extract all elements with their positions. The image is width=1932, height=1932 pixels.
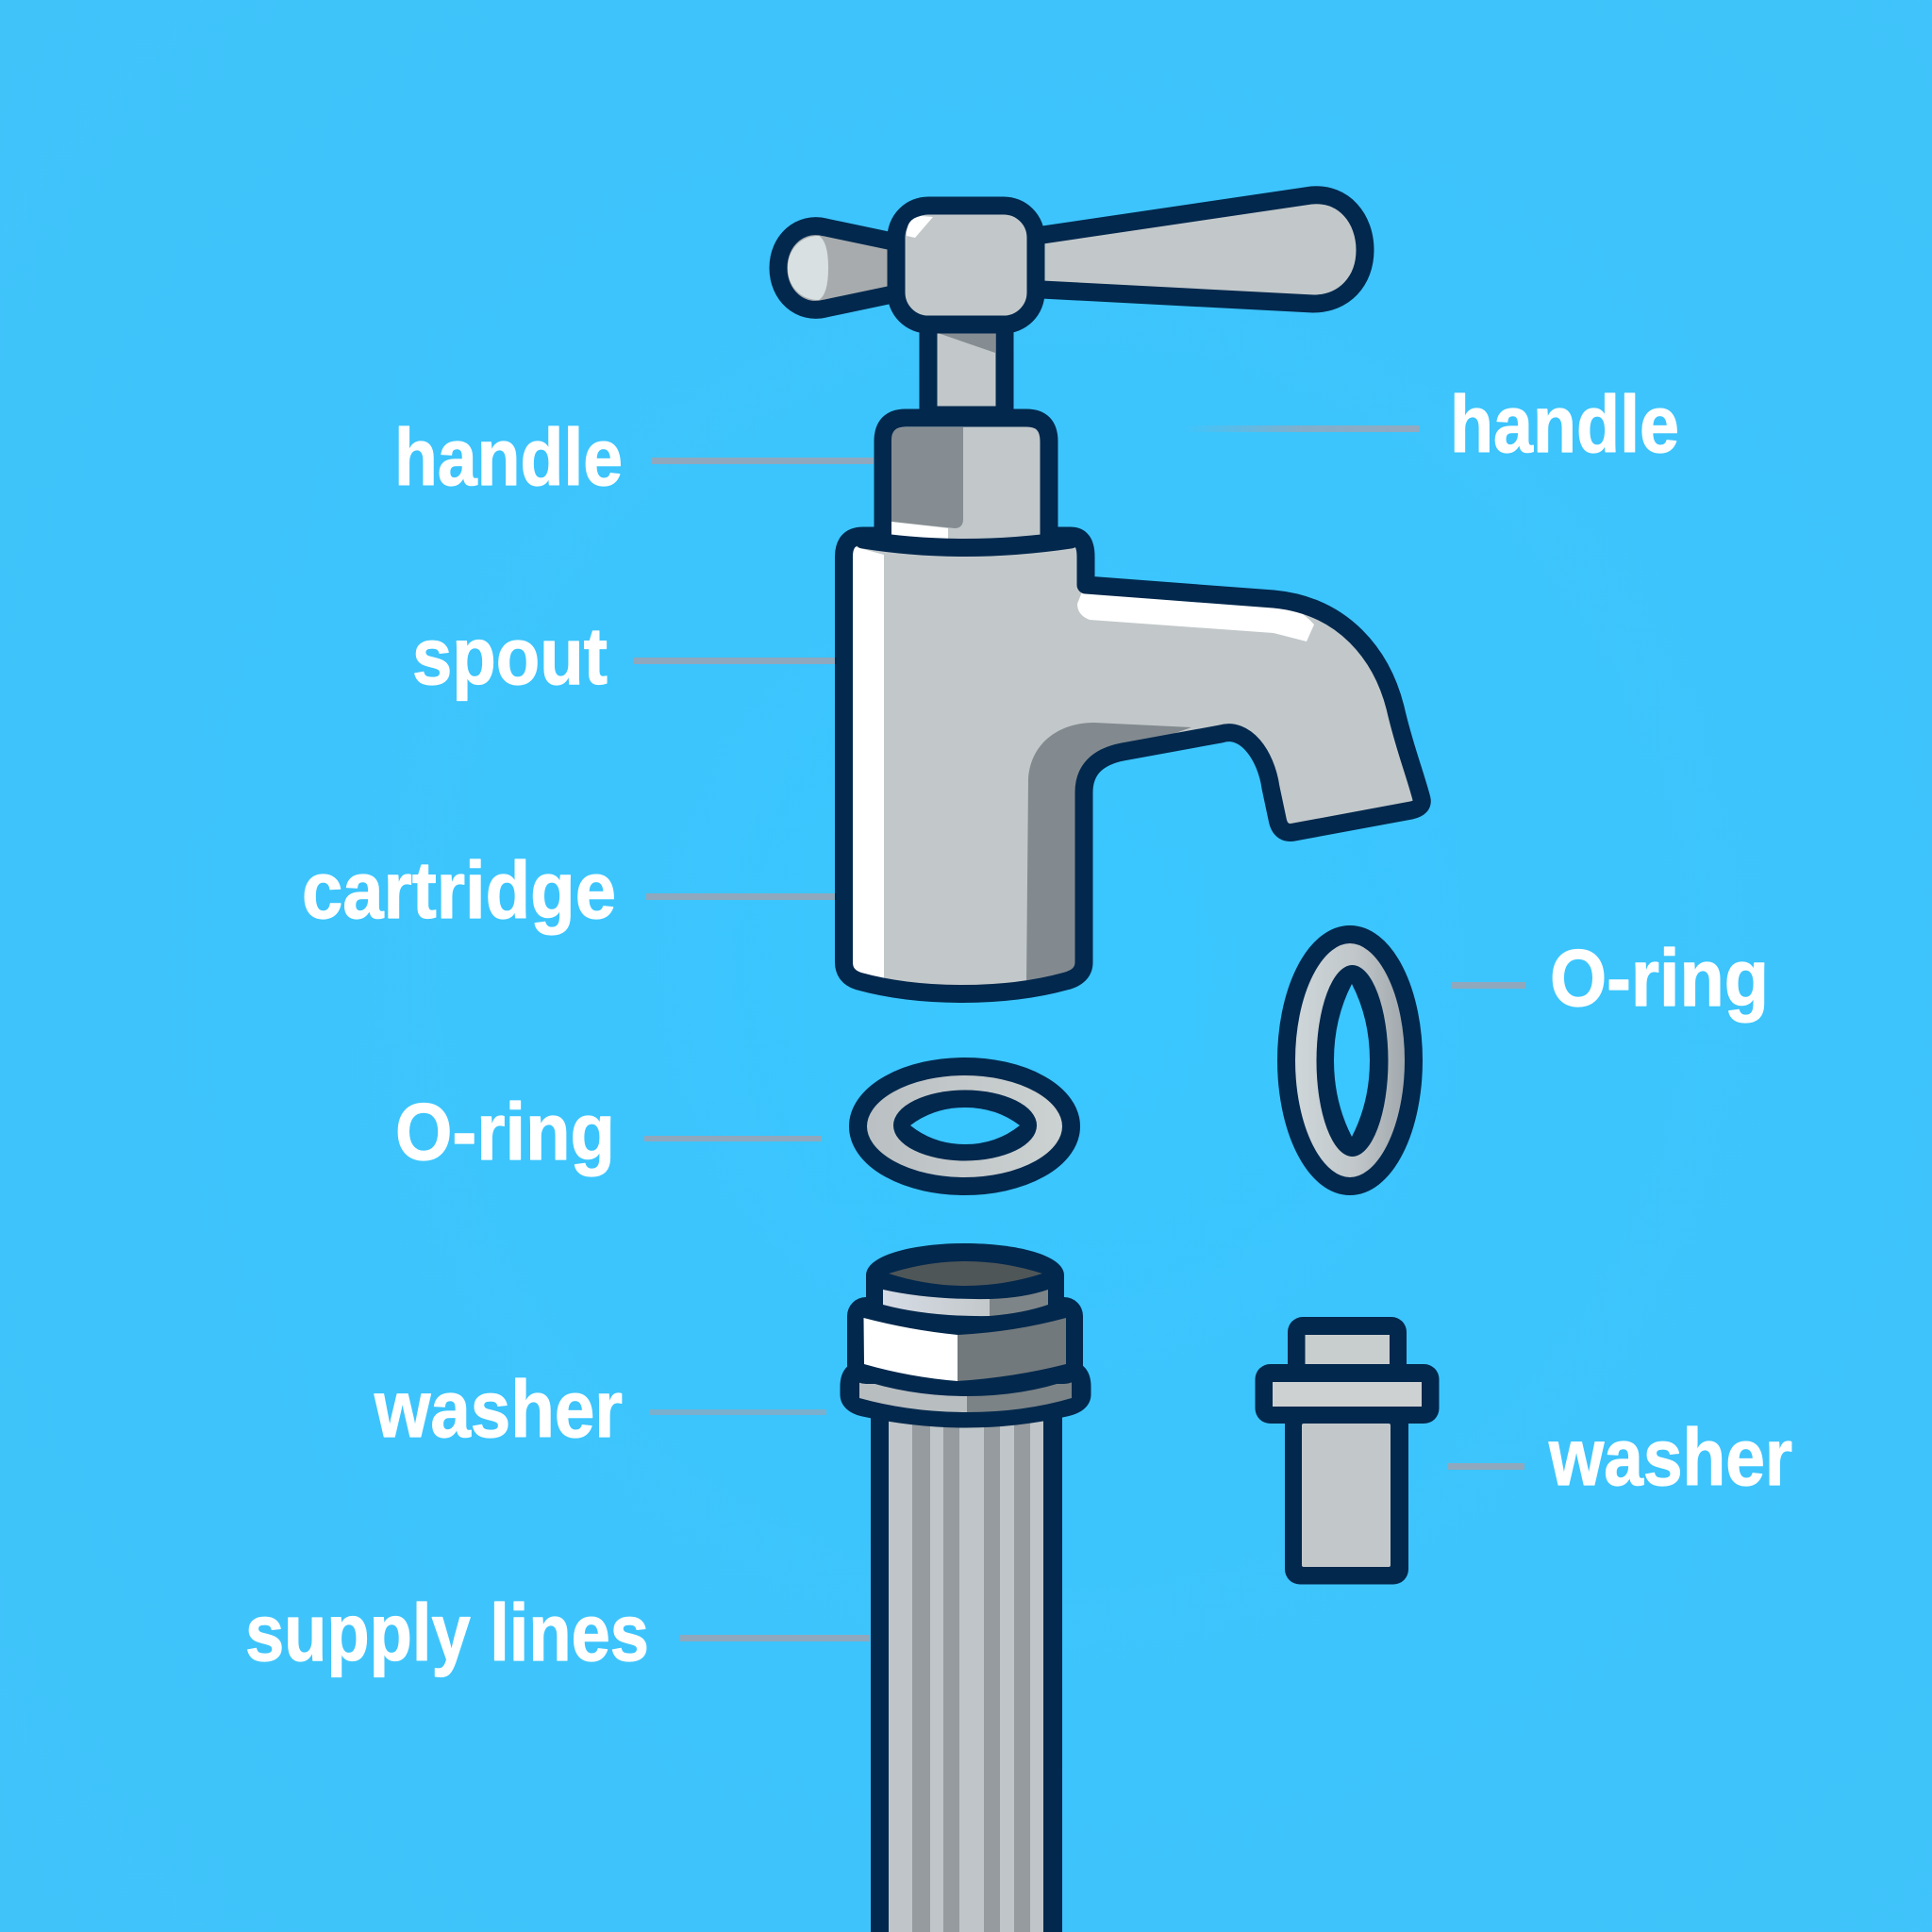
leader lines — [634, 425, 1525, 1641]
upright O-ring — [1287, 934, 1413, 1187]
label: supply lines: supply lines — [245, 1589, 649, 1678]
handle left knob — [778, 226, 915, 309]
faucet body and spout — [843, 536, 1422, 994]
cartridge collar — [863, 418, 1071, 547]
label: O-ring left: O-ring — [395, 1088, 615, 1177]
flat O-ring — [858, 1066, 1072, 1187]
label: O-ring right: O-ring — [1550, 934, 1769, 1024]
handle hub — [896, 206, 1036, 325]
label: handle left: handle — [394, 413, 623, 503]
label: cartridge: cartridge — [302, 846, 616, 936]
threaded fitting — [847, 1243, 1083, 1419]
supply line pipe — [871, 1410, 1062, 1932]
label: washer left: washer — [374, 1365, 623, 1455]
body outline — [843, 536, 1422, 994]
body highlight — [849, 545, 884, 986]
handle stem — [928, 321, 1005, 415]
label: washer right: washer — [1548, 1413, 1792, 1503]
handle lever arm — [1024, 195, 1365, 304]
separate washer — [1255, 1317, 1440, 1585]
label: handle right: handle — [1450, 380, 1679, 470]
label: spout: spout — [412, 612, 608, 702]
spout highlight — [1077, 590, 1314, 641]
underside shadow — [1026, 723, 1191, 986]
